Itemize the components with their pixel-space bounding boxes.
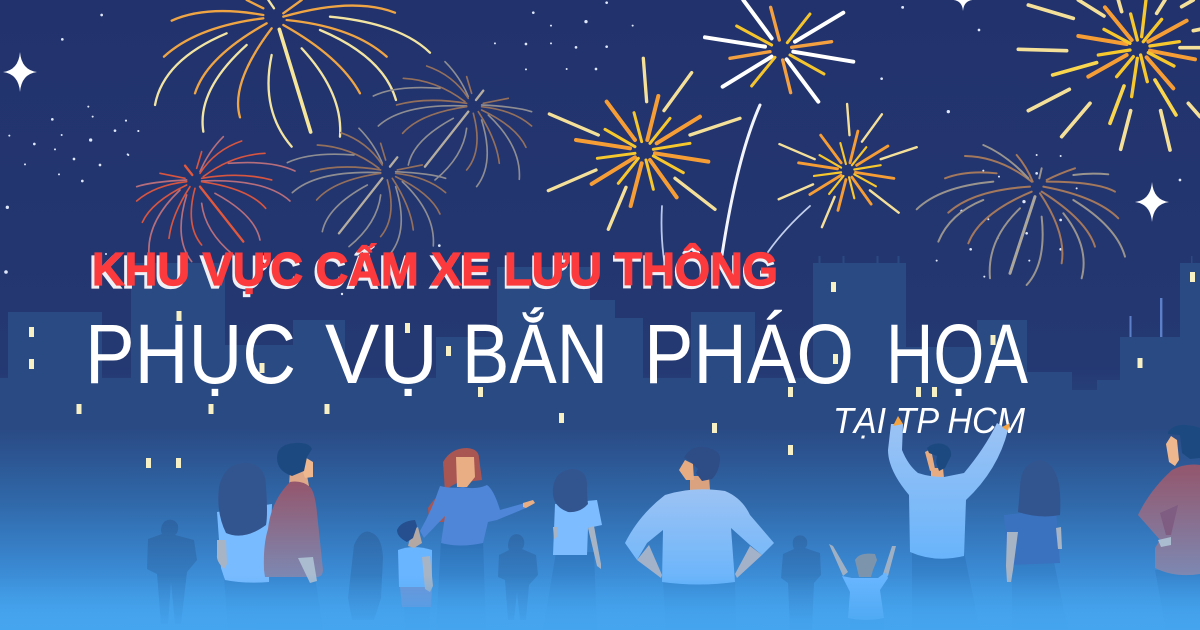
title line 3: location: TẠI TP HCM	[833, 400, 1025, 441]
background crowd silhouettes	[147, 520, 821, 630]
lit windows	[29, 272, 1195, 468]
firework: large burst top right	[1018, 0, 1200, 150]
person: child with raised arms	[829, 544, 896, 630]
person: large man, hands on hips	[625, 447, 774, 630]
person: man in wine sweater	[264, 443, 323, 630]
title line 2: white heading: PHÁO	[644, 307, 854, 401]
firework: red arcs left, mirrored	[137, 137, 295, 262]
person: man in wine sweater, right edge	[1138, 425, 1200, 630]
firework: orange star burst centre	[548, 58, 740, 229]
firework: dim arcs upper middle	[373, 62, 532, 187]
firework: small orange burst	[779, 104, 917, 227]
person: woman in pale tee	[543, 469, 602, 630]
bottom glow fade	[0, 575, 1200, 630]
title line 1: red heading: KHU VỰC CẤM XE LƯU THÔNG	[89, 246, 777, 298]
firework rising streaks	[662, 105, 810, 272]
firework: dim arcs right	[917, 145, 1125, 285]
title line 2: white heading: PHỤC	[85, 307, 296, 401]
firework: dim arcs centre left	[287, 128, 446, 253]
person: woman in blue, back view	[1004, 460, 1068, 630]
person: small child facing left	[397, 520, 433, 630]
firework: large cream and orange arcs	[155, 0, 430, 147]
title line 2: white heading	[85, 307, 1028, 401]
person: woman with red hair and child	[420, 448, 535, 630]
sky stars	[4, 1, 1181, 295]
person: man with raised arms	[888, 416, 1010, 630]
person: woman with long hair, left	[217, 463, 278, 630]
sparkle stars	[3, 0, 1169, 222]
city skyline silhouette	[0, 256, 1200, 429]
title line 2: white heading: BẮN	[462, 307, 608, 401]
title line 2: white heading: HỌA	[886, 307, 1028, 401]
title line 1: red heading: KHU VỰC CẤM XE LƯU THÔNG	[92, 243, 778, 295]
title line 2: white heading: VỤ	[325, 307, 438, 401]
antennas	[1130, 298, 1162, 337]
firework: white and yellow burst top	[705, 0, 853, 102]
